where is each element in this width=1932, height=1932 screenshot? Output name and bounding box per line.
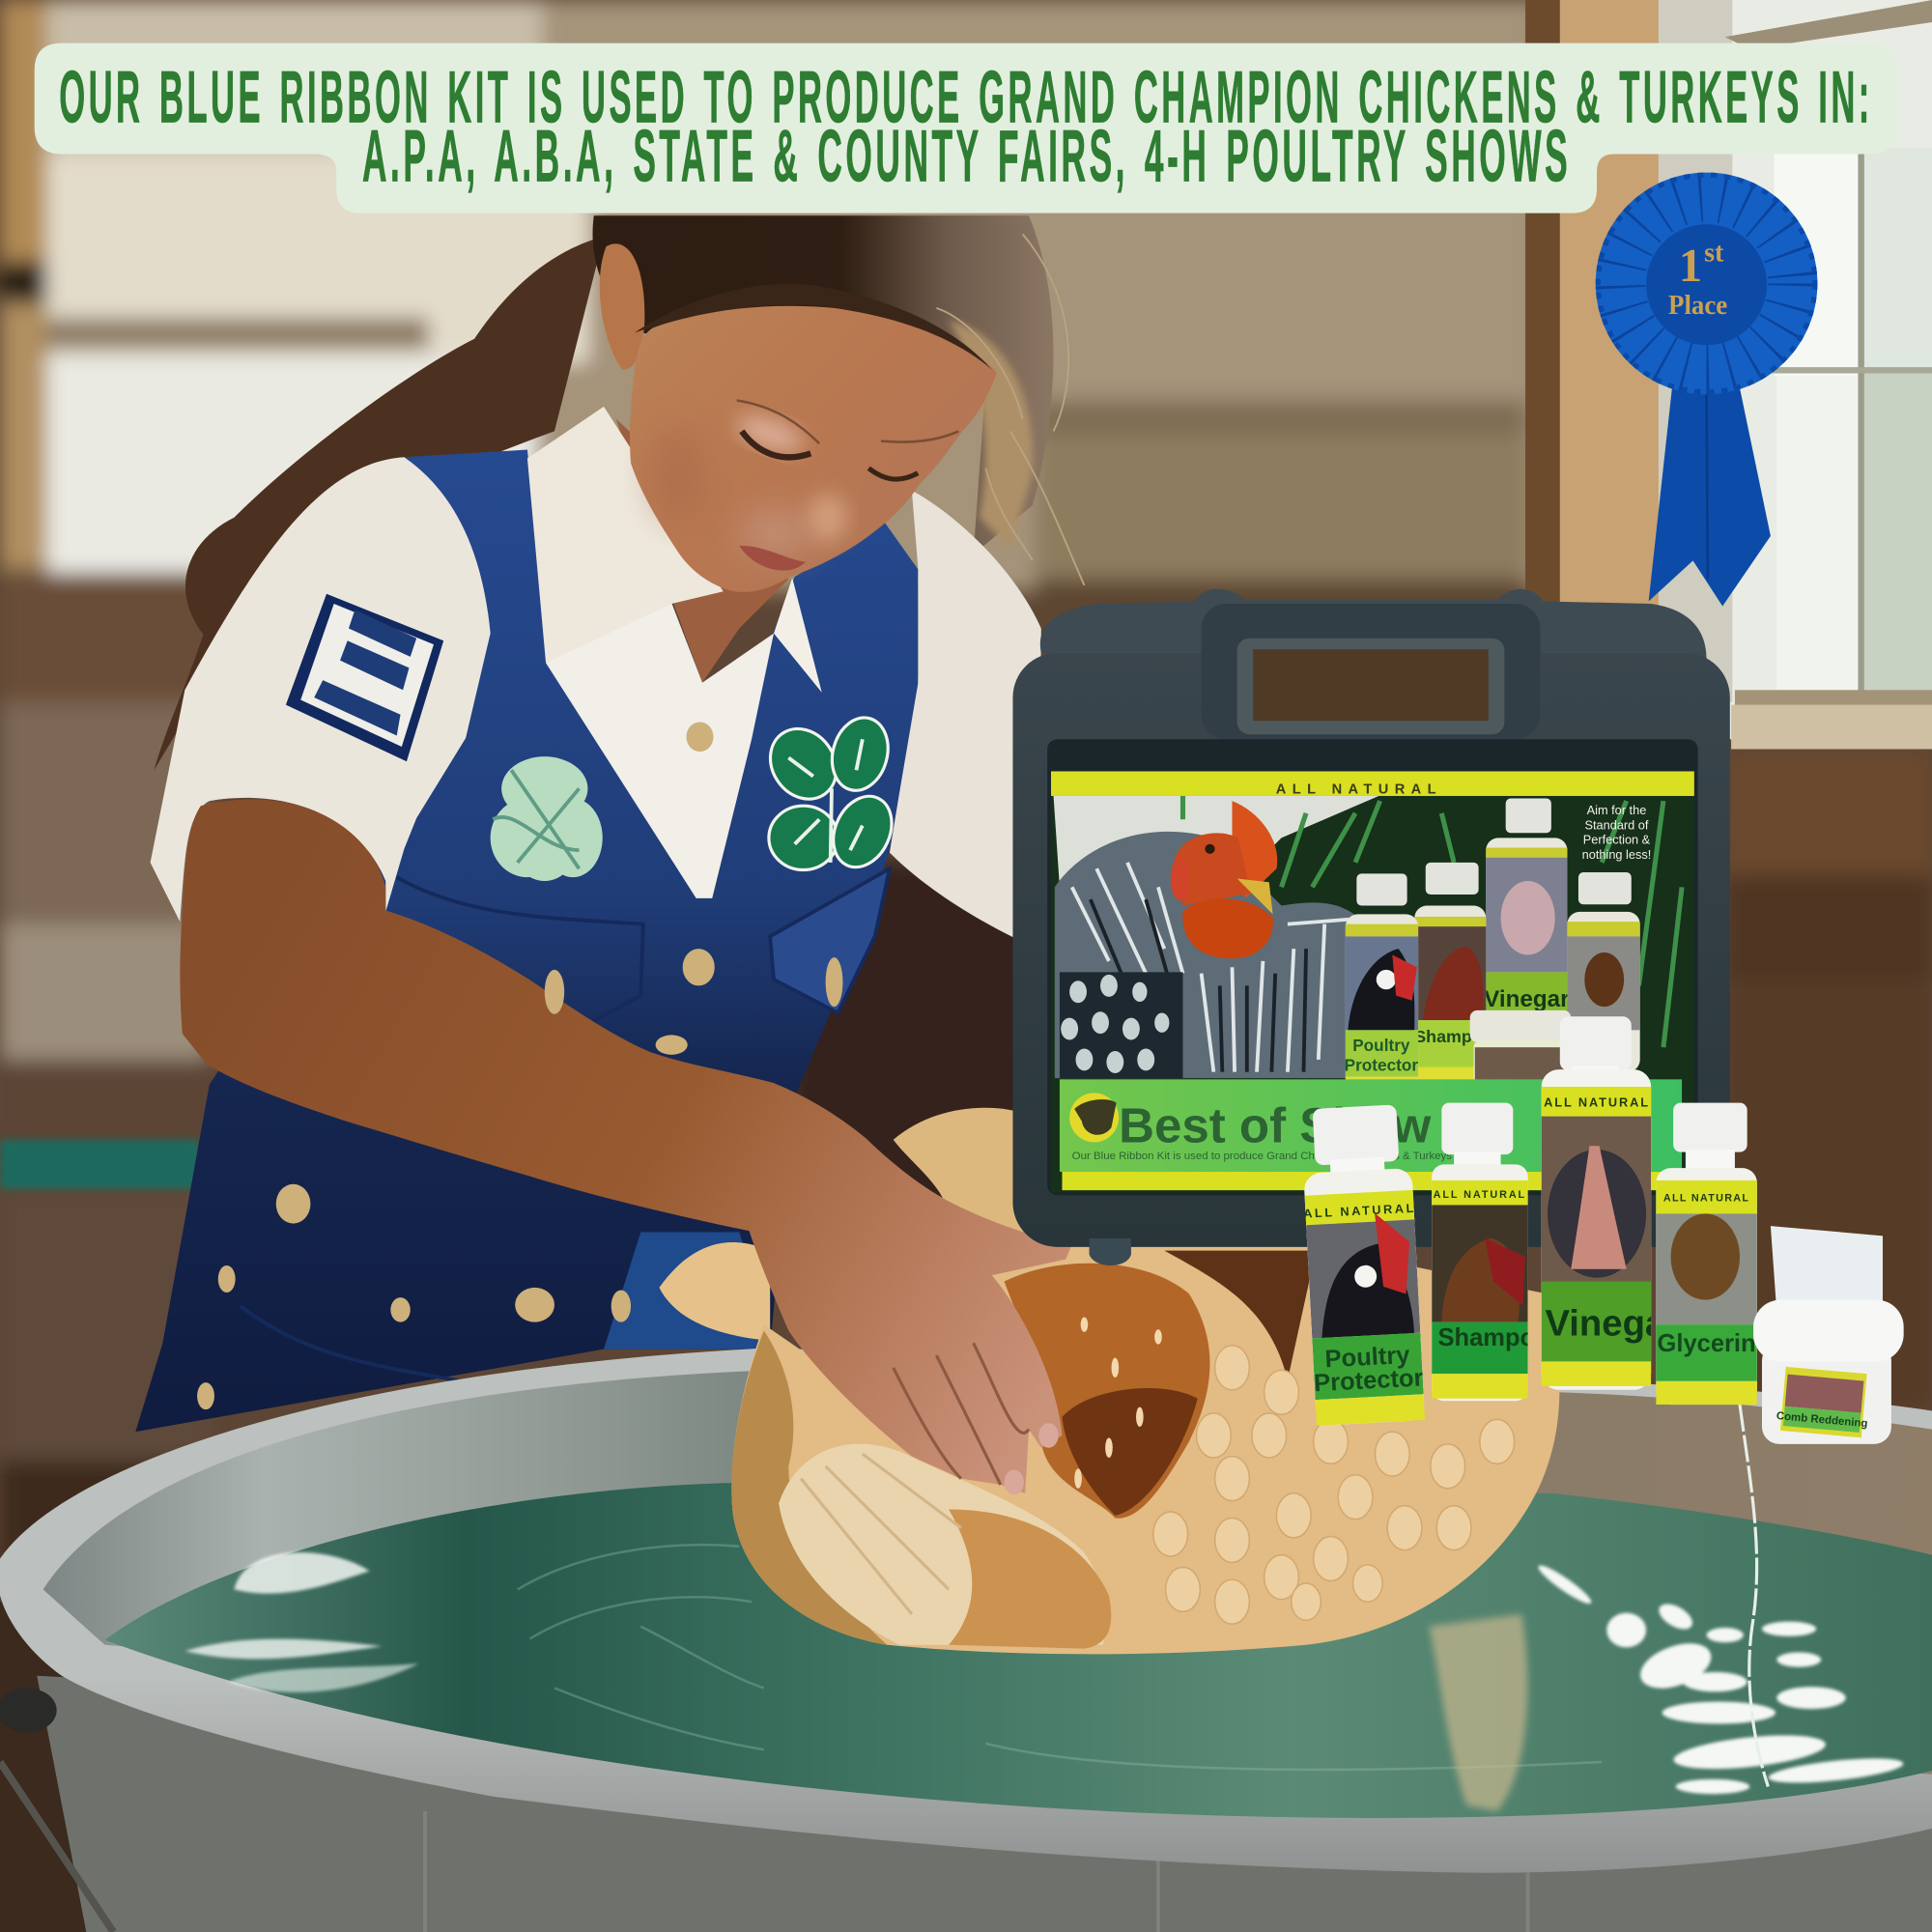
- case inner panel: [1047, 739, 1698, 1195]
- small comb reddening jar: [1470, 1010, 1571, 1099]
- bottle: Glycerin: [1656, 1103, 1757, 1405]
- aim for the standard tagline: nothing less!: [1582, 847, 1651, 862]
- Best of Show title: Best of Show: [1119, 1097, 1432, 1152]
- blue ribbon: 1st place rosette: [1596, 173, 1817, 607]
- bottle: Poultry Protector: Poultry: [1324, 1342, 1411, 1373]
- tub seams: [425, 1811, 1528, 1932]
- blue ribbon: 1st place rosette: Place: [1668, 291, 1727, 321]
- shirt placket: [546, 596, 774, 898]
- jar: Comb Reddening: Comb Reddening: [1776, 1410, 1868, 1430]
- tub outer body: [37, 1676, 1932, 1932]
- headline banner: [35, 43, 1897, 213]
- head hair: [593, 215, 1053, 554]
- left sleeve: [151, 457, 491, 922]
- hen badge: [1069, 1093, 1119, 1142]
- label top band: [1051, 771, 1694, 796]
- bottle: Shampoo: ALL NATURAL: [1434, 1189, 1526, 1201]
- left collar: [527, 407, 724, 663]
- dark tail feathers: [1164, 1251, 1316, 1380]
- arm: [180, 799, 1072, 1493]
- grass: [1182, 796, 1682, 1047]
- chicken reflection: [1430, 1614, 1527, 1811]
- hen head: [1171, 801, 1277, 958]
- green clover emblem: [757, 711, 902, 877]
- bottle: Poultry Protector: Protector: [1313, 1364, 1424, 1397]
- small comb reddening jar: Comb Reddening: [1477, 1086, 1564, 1097]
- 1st place text: st: [1704, 238, 1724, 268]
- rosette: [1596, 173, 1817, 394]
- vest: [135, 450, 918, 1432]
- hair over forehead: [635, 284, 992, 370]
- gold buttons: [197, 722, 842, 1409]
- right sleeve: [890, 491, 1041, 939]
- small poultry protector bottle: Poultry: [1352, 1036, 1410, 1055]
- pale clover crest: [491, 756, 603, 881]
- teal pipe: [0, 1140, 200, 1189]
- hen feathers: [1055, 832, 1392, 1078]
- top tail tuft: [894, 1108, 1035, 1244]
- bottle: Glycerin: Glycerin: [1658, 1330, 1756, 1357]
- floor: [0, 1602, 86, 1932]
- small bottles on label: [1345, 799, 1640, 1099]
- water highlights right: [1535, 1561, 1904, 1794]
- bottle: Shampoo: Shampoo: [1438, 1324, 1550, 1351]
- brown breast: [1005, 1264, 1209, 1519]
- girl: arm and hand: [180, 799, 1072, 1494]
- handle inner frame: [1237, 639, 1504, 734]
- feather on sleeve: [545, 970, 564, 1014]
- bottle: Vinegar: Vinegar: [1545, 1303, 1680, 1345]
- right collar: [774, 578, 822, 693]
- tub inner wall: [43, 1370, 1932, 1775]
- small glycerin bottle: [1567, 872, 1640, 1072]
- pouring stream: [1740, 1405, 1768, 1786]
- small vinegar bottle: [1484, 799, 1570, 1012]
- small shampoo bottle: [1414, 863, 1486, 1086]
- left flank shading: [731, 1331, 887, 1645]
- fingers: [894, 1343, 1029, 1485]
- jar: Comb Reddening: [1753, 1226, 1904, 1444]
- case label: [1051, 771, 1694, 1193]
- blonde side strands: [949, 321, 1033, 549]
- water highlights left: [185, 1552, 419, 1692]
- bottle: Poultry Protector: [1298, 1104, 1427, 1426]
- ear: [600, 243, 644, 370]
- 1st place text: 1: [1679, 241, 1702, 292]
- small vinegar bottle: Vinegar: [1484, 986, 1570, 1012]
- case body: [1012, 653, 1730, 1247]
- bottle: Shampoo: [1432, 1103, 1528, 1401]
- lips: [739, 546, 806, 571]
- bottle: Vinegar: ALL NATURAL: [1544, 1094, 1650, 1109]
- water: [104, 1482, 1932, 1818]
- small shampoo bottle: Shampo: [1414, 1027, 1483, 1046]
- water ripples: [518, 1545, 1602, 1770]
- tub: galvanised wash tub: [0, 1348, 1932, 1932]
- ribbon tails: [1649, 388, 1771, 607]
- breast feather spots: [1074, 1318, 1162, 1489]
- lower vest bright panel: [604, 1233, 777, 1350]
- handle surround: [1202, 604, 1540, 739]
- handle: [0, 1688, 113, 1932]
- aim for the standard tagline: Aim for the: [1587, 803, 1646, 817]
- case foot: [1090, 1238, 1131, 1265]
- aim for the standard tagline: Perfection &: [1583, 833, 1651, 847]
- photo backdrop: [1054, 796, 1378, 887]
- bottle: Glycerin: ALL NATURAL: [1663, 1193, 1749, 1205]
- title subtitle: Our Blue Ribbon Kit is used to produce Grand Champion Chickens & Turkeys: [1072, 1151, 1452, 1162]
- carrying case: Best of Show kit: [1012, 589, 1730, 1265]
- all natural text: ALL NATURAL: [1276, 781, 1442, 797]
- bottle: Poultry Protector: ALL NATURAL: [1303, 1201, 1416, 1221]
- neck: [616, 419, 788, 683]
- face shading: [653, 408, 848, 554]
- left wing tuft: [659, 1242, 770, 1341]
- rosette centre: [1646, 224, 1767, 345]
- green title band: [1060, 1079, 1682, 1172]
- small poultry protector bottle: [1345, 873, 1418, 1094]
- fingernails: [1005, 1423, 1059, 1494]
- ponytail hair: [154, 237, 604, 770]
- wooden post: [1525, 0, 1659, 610]
- wing feather lines: [801, 1454, 961, 1614]
- tub rim: [0, 1348, 1932, 1873]
- window: [1659, 0, 1932, 750]
- handle and latches: [1040, 589, 1707, 659]
- scalloped feathers: [1153, 1346, 1515, 1624]
- hair flyaways: [936, 234, 1084, 585]
- sleeve patch: [286, 594, 443, 761]
- vest pockets: [241, 868, 890, 1392]
- light wing: [779, 1444, 1106, 1645]
- eyes: [737, 401, 958, 479]
- small poultry protector bottle: Protector: [1345, 1055, 1418, 1074]
- hen scale pattern: [1060, 972, 1182, 1078]
- girl: hair, head and uniform: [135, 215, 1084, 1432]
- label bottom band: [1062, 1172, 1678, 1190]
- bottle: Vinegar: [1542, 1016, 1652, 1390]
- face: [630, 306, 997, 592]
- chicken: [659, 1108, 1559, 1811]
- banner shape: [35, 43, 1897, 213]
- aim for the standard tagline: Standard of: [1585, 817, 1649, 832]
- body: [731, 1226, 1559, 1654]
- handle opening: [1253, 649, 1489, 721]
